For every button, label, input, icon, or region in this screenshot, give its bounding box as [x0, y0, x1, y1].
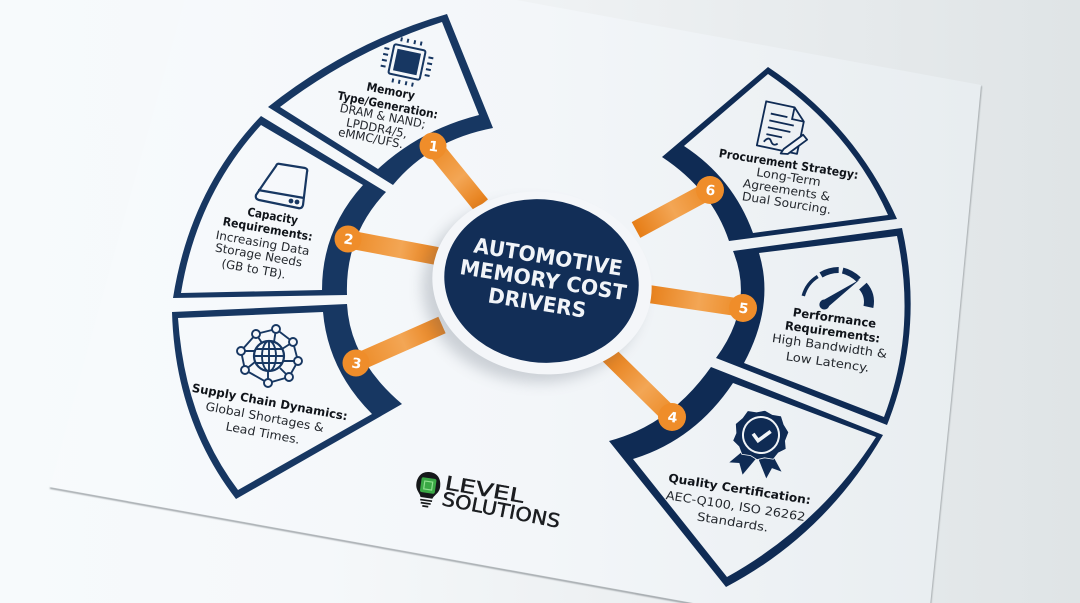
hub title: AUTOMOTIVE [472, 234, 624, 281]
icon: global network [237, 325, 302, 387]
text: quality: AEC-Q100, ISO 26262 [665, 488, 806, 524]
text: procurement: Procurement Strategy: [718, 146, 859, 182]
text: supply chain [191, 381, 349, 447]
logo wordmark [440, 472, 562, 533]
connector bars [347, 146, 743, 417]
text: procurement: Agreements & [742, 176, 831, 204]
text: quality: Standards. [696, 510, 769, 535]
panel 6 frame [662, 67, 897, 241]
panel: procurement [662, 67, 897, 241]
icon: speed gauge [802, 266, 873, 315]
number badges: 5 [738, 300, 749, 318]
number badges [334, 132, 757, 431]
panel: capacity [173, 116, 386, 298]
text: procurement: Dual Sourcing. [741, 189, 832, 217]
text: performance [771, 305, 888, 375]
text: memory type: DRAM & NAND; [339, 101, 427, 131]
text: supply chain: Supply Chain Dynamics: [191, 381, 349, 423]
text: supply chain: Global Shortages & [204, 399, 325, 435]
icon: contract document [756, 101, 813, 158]
central hub [411, 178, 664, 396]
text: capacity: (GB to TB). [220, 257, 287, 282]
logo wordmark: SOLUTIONS [440, 488, 562, 533]
panel 2 frame [173, 116, 386, 298]
panel: performance [716, 228, 911, 425]
text: capacity [214, 205, 314, 282]
text: memory type [336, 80, 439, 151]
number badges: 1 [428, 138, 439, 156]
text: capacity: Requirements: [222, 214, 314, 244]
panel: quality [609, 367, 883, 587]
text: procurement: Long-Term [755, 165, 822, 189]
text: performance: High Bandwidth & [771, 331, 888, 361]
text: performance: Low Latency. [785, 349, 870, 375]
icon: chip [378, 34, 436, 90]
panel 4 frame [609, 367, 883, 587]
text: memory type: eMMC/UFS. [337, 125, 404, 151]
icon: certification badge [728, 406, 792, 481]
panel: memory type [268, 14, 493, 185]
text: capacity: Storage Needs [214, 241, 303, 270]
panel 3 frame [172, 304, 402, 499]
text: memory type: Memory [365, 80, 416, 103]
text: procurement [718, 146, 859, 217]
text: quality: Quality Certification: [667, 471, 812, 507]
text: performance: Requirements: [784, 318, 881, 346]
text: performance: Performance [792, 305, 877, 331]
icon: storage drive [256, 164, 307, 208]
number badges: 2 [343, 231, 354, 249]
logo wordmark: LEVEL [443, 472, 526, 508]
text: memory type: LPDDR4/5, [345, 115, 409, 141]
text: capacity: Increasing Data [215, 228, 311, 258]
number badges: 4 [667, 409, 679, 427]
panel: supply chain [172, 304, 402, 499]
text: memory type: Type/Generation: [336, 88, 439, 122]
number badges: 3 [351, 355, 362, 373]
hub title: MEMORY COST [458, 255, 629, 305]
text: supply chain: Lead Times. [225, 419, 301, 447]
text: quality [665, 471, 812, 535]
panel 5 frame [716, 228, 911, 425]
hub title [458, 234, 629, 323]
logo: level solutions [413, 470, 562, 533]
icon: light bulb [413, 470, 442, 508]
hub title: DRIVERS [486, 283, 588, 323]
text: capacity: Capacity [246, 205, 299, 227]
panel 1 frame [268, 14, 493, 185]
number badges: 6 [705, 183, 716, 199]
